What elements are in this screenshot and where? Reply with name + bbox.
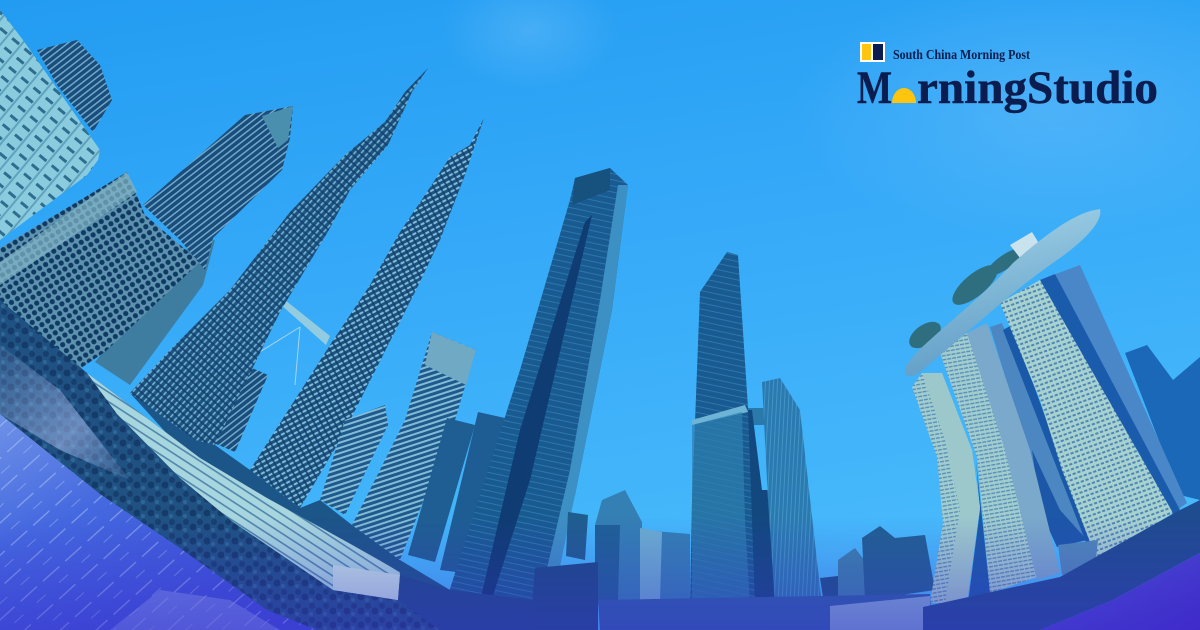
building: rear top-left block bbox=[37, 40, 112, 132]
wordmark remainder: rningStudio bbox=[917, 62, 1158, 114]
right foliage and ground bbox=[923, 500, 1200, 630]
building: rear slim tower bbox=[408, 418, 475, 562]
centre ground buildings bbox=[398, 562, 932, 630]
left podium, foliage and water bbox=[0, 300, 470, 630]
sands left tower bbox=[912, 373, 980, 603]
sky park boat bbox=[905, 209, 1100, 376]
building: dark striped tower bbox=[143, 106, 293, 270]
hazy light over trees bbox=[0, 345, 130, 480]
twin towers with bridge bbox=[690, 252, 822, 605]
sands rear slab bbox=[1040, 265, 1187, 513]
building: tall white-striped tower bbox=[352, 332, 476, 560]
building: mid rear tower bbox=[320, 405, 388, 515]
left cluster of towers bbox=[0, 10, 484, 630]
tower: Petronas left bbox=[130, 68, 428, 445]
sands large tower bbox=[1000, 280, 1173, 560]
building: low perforated tower bbox=[0, 172, 200, 372]
right edge dark towers bbox=[1125, 345, 1200, 500]
sands middle slab bbox=[990, 323, 1087, 547]
skybridge bbox=[250, 300, 330, 385]
tower: Petronas right bbox=[250, 118, 484, 508]
central glass tower bbox=[440, 168, 628, 618]
tree line bbox=[0, 300, 470, 630]
sky park garden bbox=[905, 244, 1027, 354]
building: top-left white tower bbox=[0, 10, 100, 240]
podium building bbox=[87, 373, 400, 600]
Marina Bay Sands hotel bbox=[905, 209, 1187, 603]
tower base mass bbox=[130, 393, 470, 630]
water reflection bbox=[0, 414, 317, 630]
building: striped block behind low tower bbox=[95, 240, 215, 385]
sun icon bbox=[892, 88, 916, 103]
wordmark: M bbox=[857, 62, 892, 114]
logo mark bbox=[860, 42, 885, 62]
logo: South China Morning Post / Morning Studio bbox=[857, 42, 1158, 114]
rear right low-rise bbox=[820, 526, 935, 604]
building: small rear tower bbox=[195, 365, 268, 452]
publisher name: South China Morning Post bbox=[893, 47, 1030, 62]
sands centre tower bbox=[940, 333, 1037, 593]
rear low-rise cluster bbox=[566, 490, 690, 605]
